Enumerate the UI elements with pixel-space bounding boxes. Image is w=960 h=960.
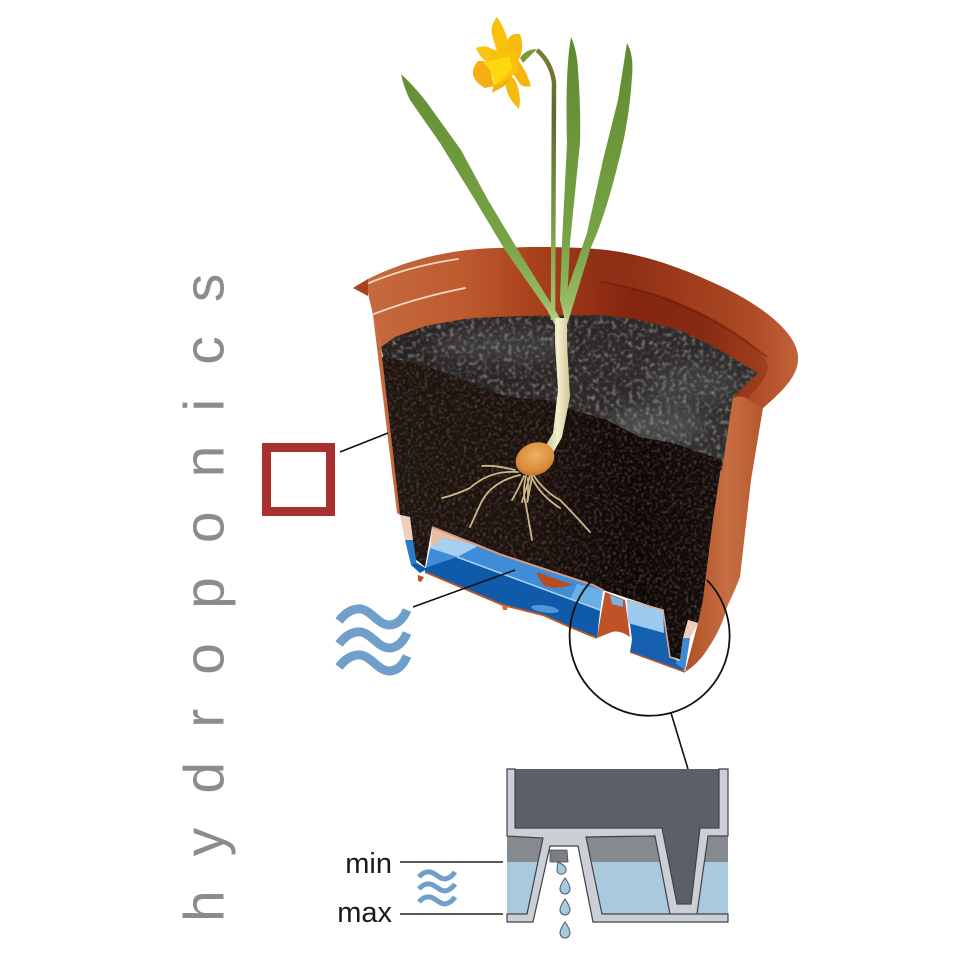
planter pot cutaway [353, 247, 798, 672]
min level line [400, 861, 503, 863]
max level line [400, 913, 503, 915]
plant: daffodil [401, 17, 632, 540]
left cut wall [373, 315, 400, 515]
label: max: max [337, 897, 392, 929]
icon: small water waves [419, 872, 455, 904]
planter wall profile [507, 769, 728, 922]
bulb [510, 436, 560, 482]
roots [442, 466, 590, 540]
air gap band [507, 836, 728, 863]
stem [537, 50, 554, 320]
wick column [597, 592, 630, 638]
pot back interior and rim [353, 247, 798, 420]
rim lip on left [353, 279, 368, 296]
detail diagram: reservoir cross-section [507, 769, 728, 938]
water reservoir, main chamber [425, 527, 603, 638]
soil in detail [515, 769, 719, 904]
rim band on right side [560, 248, 798, 408]
white shoot [546, 318, 570, 455]
leader line from red square to soil [340, 433, 388, 452]
rim groove [600, 282, 767, 357]
left leaf [401, 74, 560, 325]
right outer wall [685, 396, 763, 672]
soil top surface [381, 315, 758, 470]
flower [473, 17, 537, 109]
wick block [550, 850, 568, 862]
label: min: min [345, 848, 392, 880]
right leaf [562, 43, 632, 325]
white notch under wick [533, 846, 600, 922]
icon: red square (soil) [266, 448, 330, 512]
leader line from circle to detail [671, 713, 688, 769]
water band [507, 862, 728, 915]
water reservoir, left channel [400, 515, 508, 610]
leader line from waves to reservoir [413, 570, 515, 607]
vertical title: hydroponics: hydroponics [172, 240, 236, 922]
magnifier circle [570, 573, 730, 716]
soil cut face [382, 357, 722, 660]
icon: water waves (reservoir) [339, 609, 407, 671]
water reservoir, right chamber [627, 600, 698, 672]
centre leaf [560, 37, 580, 325]
rim highlights [369, 259, 465, 314]
water drops [557, 862, 570, 938]
